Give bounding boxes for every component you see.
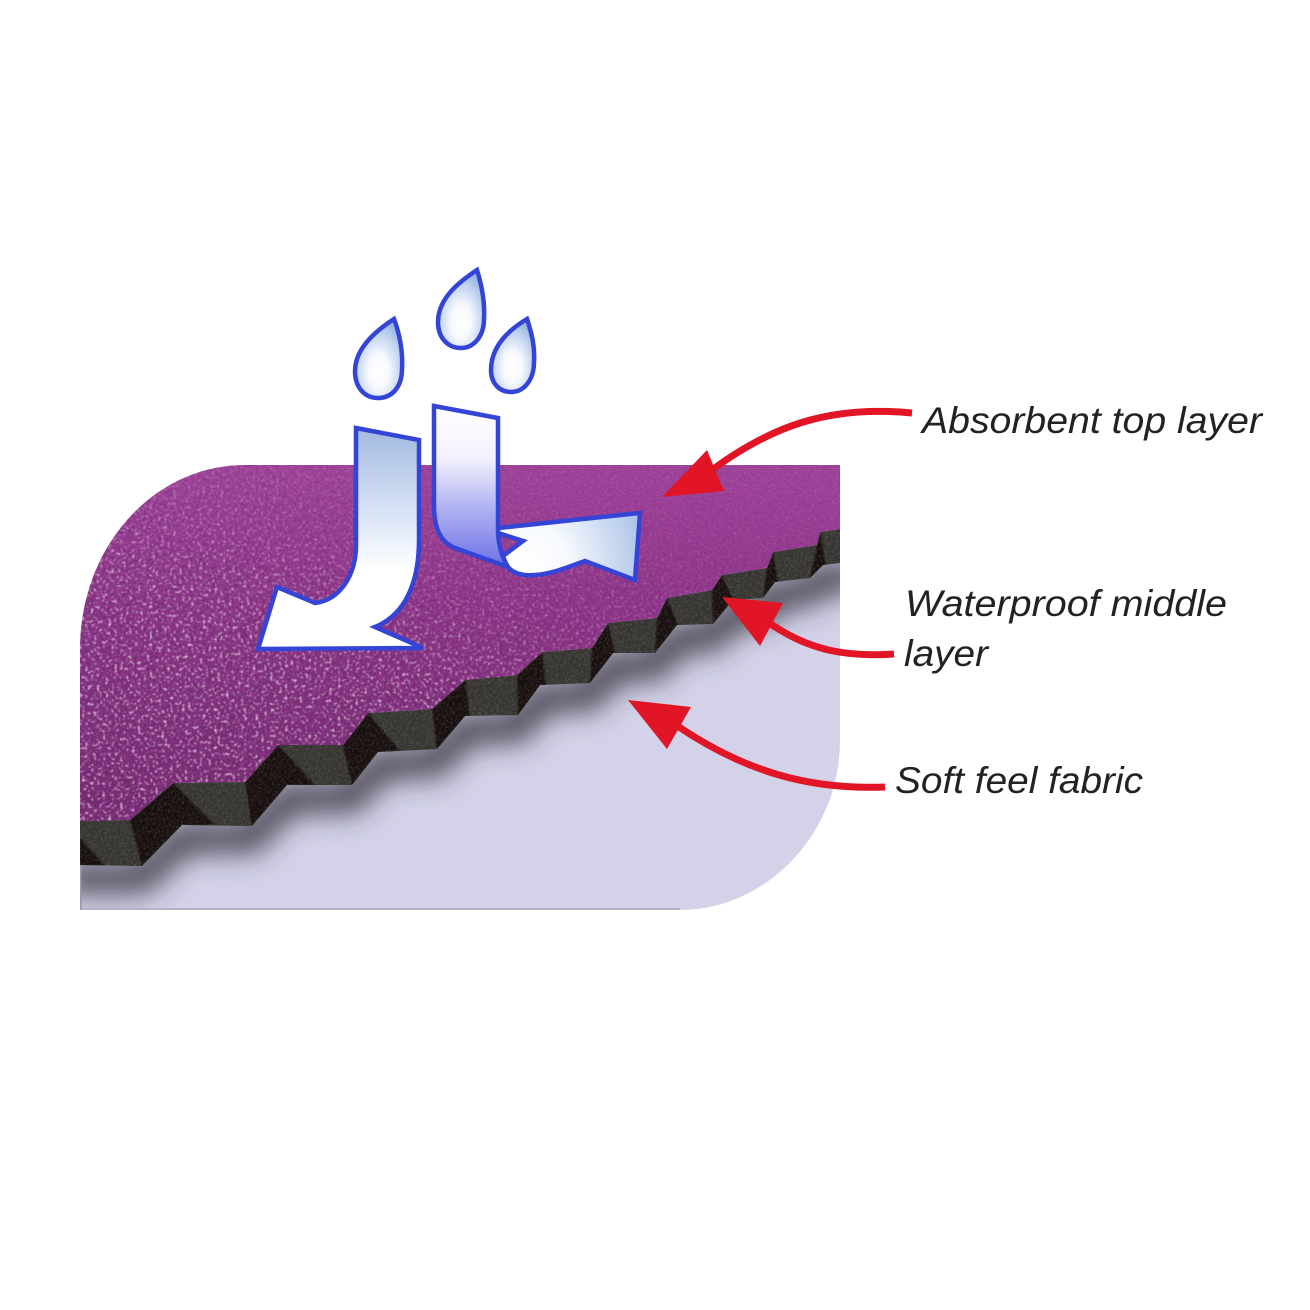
arrow: to waterproof middle layer (722, 597, 894, 655)
icon: right water drop (491, 319, 534, 392)
arrow: water wicking sideways (434, 406, 640, 580)
label: waterproof middle layer: layer (904, 633, 990, 674)
fabric diagram (80, 266, 1264, 910)
panel: absorbent top layer (80, 465, 840, 821)
icon: centre water drop (438, 270, 484, 348)
arrow: water absorbed through left (258, 428, 423, 649)
arrow: to absorbent top layer (662, 411, 912, 497)
icon: left water drop (355, 319, 402, 398)
label: waterproof middle layer: Waterproof middle (905, 583, 1227, 624)
arrow: to soft feel fabric (628, 700, 885, 787)
label: soft feel fabric: Soft feel fabric (895, 760, 1144, 801)
label: absorbent top layer: Absorbent top layer (920, 400, 1264, 441)
panel: soft feel fabric layer (60, 465, 860, 910)
label: waterproof middle layer (904, 583, 1227, 674)
panel: waterproof foam middle layer (80, 529, 840, 866)
